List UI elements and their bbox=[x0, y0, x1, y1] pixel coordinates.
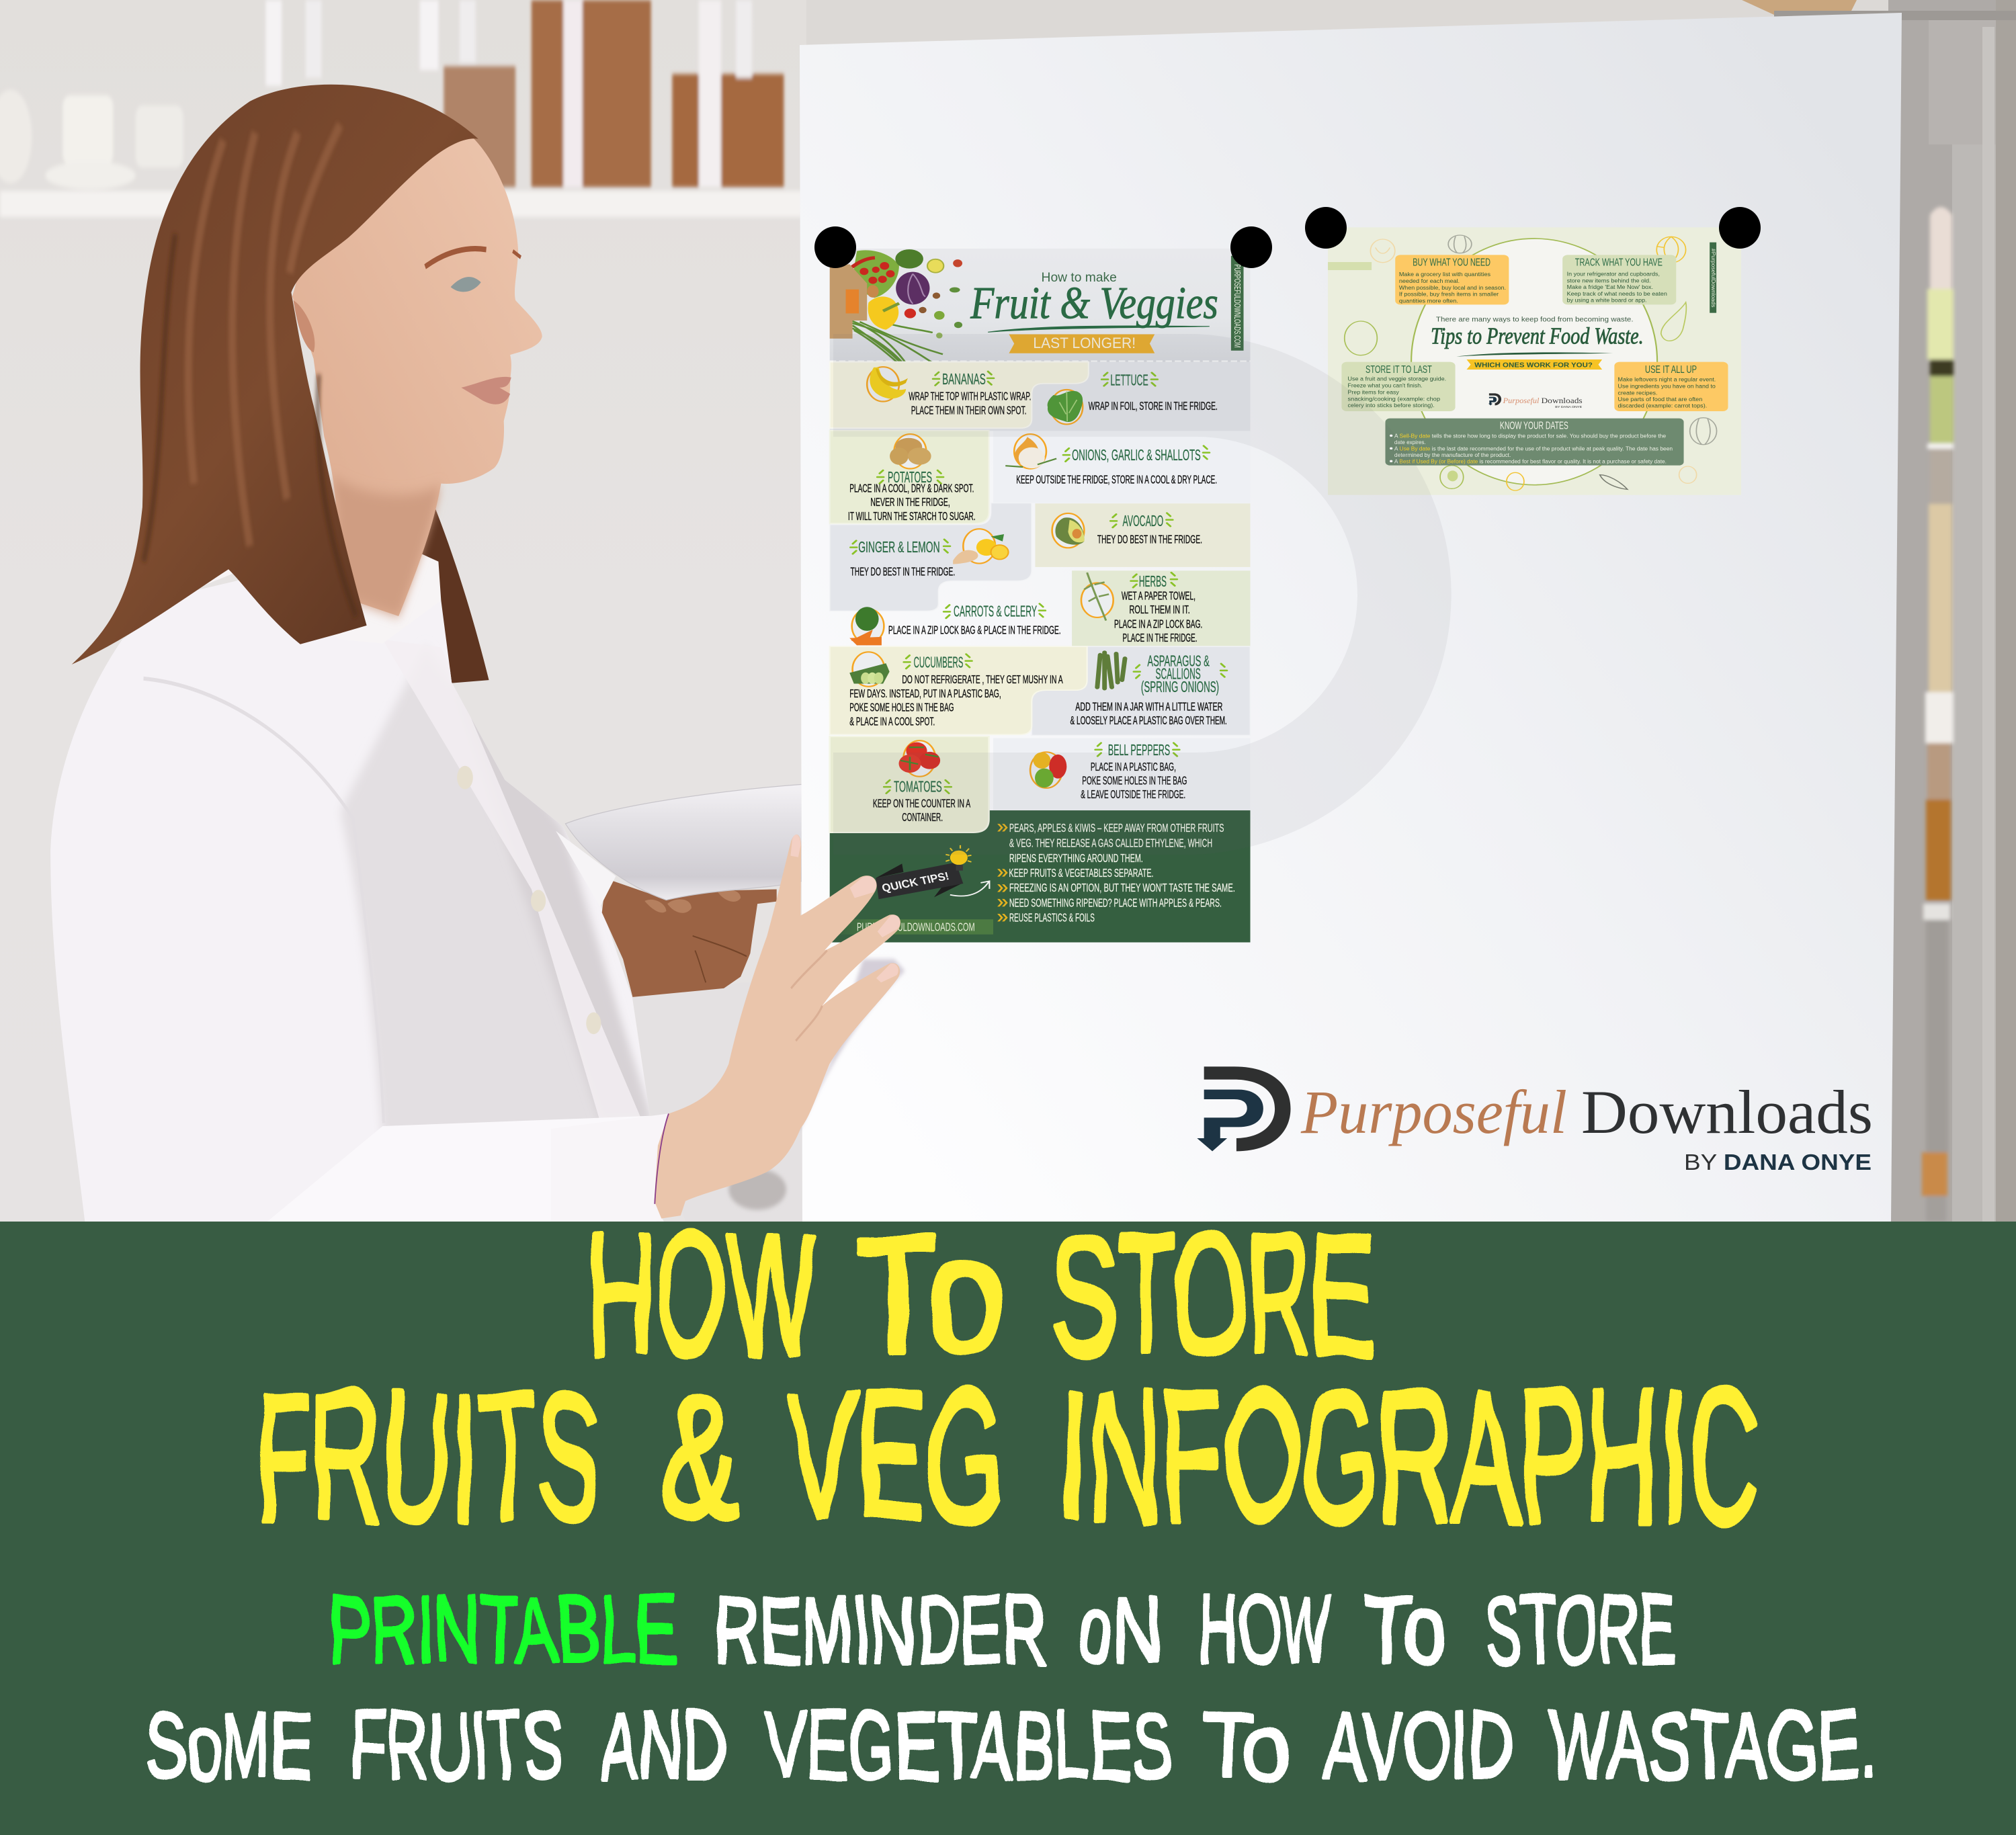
quick tips list: & VEG. THEY RELEASE A GAS CALLED ETHYLENE, WHICH bbox=[1009, 837, 1212, 850]
bowl and supporting hand bbox=[556, 784, 806, 1222]
card: use it all up: create recipes. bbox=[1618, 390, 1658, 396]
subheading line two: To bbox=[1202, 1693, 1290, 1799]
card: use it all up: Make leftovers night a regular event. bbox=[1618, 377, 1716, 383]
heading: lettuce: LETTUCE bbox=[1110, 372, 1148, 389]
shelf with jars bbox=[0, 0, 802, 217]
large infographic: how to make fruit and veggies last longer: PLACE IN A ZIP LOCK BAG & PLACE IN THE FRIDGE. bbox=[888, 624, 1061, 637]
text: cucumbers tip: DO NOT REFRIGERATE , THEY GET MUSHY IN A bbox=[902, 674, 1063, 687]
card: store it to last: Prep items for easy bbox=[1348, 389, 1399, 396]
heading: tips to prevent food waste: Tips to Prevent Food Waste. bbox=[1431, 323, 1644, 349]
icon: carrots and parsley bbox=[849, 607, 884, 645]
arrow: to tips bbox=[950, 881, 989, 896]
back hair bbox=[396, 484, 489, 683]
heading: cucumbers bbox=[904, 654, 972, 671]
subheading line two: FRUITS bbox=[351, 1693, 562, 1799]
quick tips list bbox=[997, 822, 1235, 925]
panel: potatoes: PLACE IN A COOL, DRY & DARK SPOT. bbox=[849, 482, 974, 495]
icon: cucumbers bbox=[849, 652, 890, 687]
panel: bell peppers bbox=[993, 738, 1251, 810]
heading: ginger and lemon: GINGER & LEMON bbox=[858, 539, 940, 556]
panel: cucumbers bbox=[830, 646, 1087, 734]
card: know your dates: A Best if Used By (or Before) date is recommended for best flavor or quality. It is not a purchase or safety date. bbox=[1394, 458, 1667, 465]
card: store it to last bbox=[1341, 362, 1456, 411]
heading: ginger and lemon bbox=[851, 539, 950, 556]
heading: how to store: HOW bbox=[585, 1201, 816, 1388]
card: buy what you need: When possible, buy local and in season. bbox=[1399, 285, 1506, 292]
icon: bananas bbox=[867, 367, 908, 401]
icon: onions and garlic bbox=[1005, 434, 1056, 468]
header panel bbox=[830, 249, 1251, 383]
logo mark bbox=[1197, 1066, 1290, 1151]
quick tips list: KEEP FRUITS & VEGETABLES SEPARATE. bbox=[1009, 867, 1154, 880]
subheading line one bbox=[328, 1576, 1675, 1683]
subheading line one: To bbox=[1363, 1576, 1446, 1683]
white shirt bbox=[50, 546, 667, 1223]
heading: herbs: HERBS bbox=[1139, 573, 1167, 590]
intro sentence: There are many ways to keep food from becoming waste. bbox=[1436, 315, 1634, 323]
icon: ginger and lemon bbox=[953, 529, 1009, 564]
logo wordmark: Downloads bbox=[1581, 1078, 1873, 1146]
heading: how to store: To bbox=[855, 1201, 1003, 1388]
text: potatoes tip: NEVER IN THE FRIDGE, bbox=[870, 497, 950, 509]
card: track what you have: Make a fridge 'Eat Me Now' box. bbox=[1567, 284, 1653, 291]
heading: fruits and veg infographic: & bbox=[659, 1353, 739, 1560]
heading: asparagus and scallions: SCALLIONS bbox=[1156, 666, 1201, 683]
card: know your dates: A Sell-By date tells the store how long to display the product for sale. You should buy the product before the bbox=[1394, 433, 1666, 439]
panel: tomatoes: KEEP ON THE COUNTER IN A bbox=[873, 798, 970, 810]
card: use it all up: USE IT ALL UP bbox=[1645, 364, 1697, 375]
hand shadow bbox=[791, 959, 905, 1134]
heading: fruit and veggies script: Fruit & Veggies bbox=[970, 278, 1218, 329]
ribbon: last longer: LAST LONGER! bbox=[1033, 335, 1136, 352]
large circle bbox=[1411, 239, 1657, 485]
swoosh underline bbox=[988, 326, 1210, 332]
website side tag bbox=[1231, 256, 1244, 351]
quick tips list: RIPENS EVERYTHING AROUND THEM. bbox=[1009, 852, 1143, 865]
panel: onions garlic and shallots: KEEP OUTSIDE THE FRIDGE, STORE IN A COOL & DRY PLACE. bbox=[1016, 474, 1217, 486]
icon: tomatoes bbox=[898, 740, 940, 777]
small logo: BY DANA ONYE bbox=[1555, 406, 1583, 409]
subheading line one: oN bbox=[1077, 1576, 1161, 1683]
ribbon: which ones work for you: WHICH ONES WORK FOR YOU? bbox=[1474, 362, 1593, 369]
card: store it to last: celery into sticks before storing). bbox=[1348, 402, 1435, 409]
card: know your dates: A Use By date is the last date recommended for the use of the product while at peak quality. The date has been bbox=[1394, 445, 1673, 452]
subheading line two: AND bbox=[600, 1693, 726, 1799]
card: store it to last: Use a fruit and veggie storage guide. bbox=[1348, 376, 1446, 382]
card: buy what you need: needed for each meal. bbox=[1399, 278, 1460, 285]
heading: fruits and veg infographic: VEG bbox=[787, 1353, 1005, 1560]
card: buy what you need: quantities more often. bbox=[1399, 298, 1458, 304]
finger creases bbox=[791, 951, 827, 1041]
heading: asparagus and scallions: ASPARAGUS & bbox=[1147, 653, 1210, 670]
heading: asparagus and scallions: (SPRING ONIONS) bbox=[1141, 679, 1219, 695]
heading: onions garlic and shallots: ONIONS, GARLIC & SHALLOTS bbox=[1072, 447, 1201, 464]
panel: carrots and celery: CARROTS & CELERY bbox=[954, 603, 1037, 620]
cuff edge bbox=[655, 1113, 669, 1204]
panel: avocado bbox=[1035, 503, 1251, 567]
icon: avocado bbox=[1052, 513, 1085, 548]
panel: ginger and lemon: THEY DO BEST IN THE FRIDGE. bbox=[851, 566, 955, 579]
card: know your dates: KNOW YOUR DATES bbox=[1500, 420, 1568, 431]
panel: lettuce: WRAP IN FOIL, STORE IN THE FRIDGE. bbox=[1089, 400, 1218, 413]
card: use it all up: Use ingredients you have on hand to bbox=[1618, 383, 1716, 390]
panel: asparagus and scallions: & LOOSELY PLACE A PLASTIC BAG OVER THEM. bbox=[1070, 715, 1227, 728]
quick tips list: FREEZING IS AN OPTION, BUT THEY WON'T TASTE THE SAME. bbox=[1009, 882, 1235, 895]
panel: herbs: PLACE IN A ZIP LOCK BAG. bbox=[1114, 618, 1202, 631]
card: buy what you need: If possible, buy fresh items in smaller bbox=[1399, 292, 1499, 298]
lower hand bbox=[602, 881, 777, 997]
card: use it all up: Use parts of food that are often bbox=[1618, 396, 1702, 403]
ribbon: last longer bbox=[1009, 334, 1154, 353]
white cuff at elbow bbox=[556, 831, 616, 906]
website side tag bbox=[1710, 243, 1716, 313]
heading: tomatoes bbox=[884, 779, 952, 796]
heading: onions garlic and shallots bbox=[1063, 446, 1210, 464]
heading: how to store: STORE bbox=[1054, 1201, 1376, 1388]
heading: herbs bbox=[1131, 572, 1177, 590]
website side tag: PURPOSEFULDOWNLOADS.COM bbox=[1232, 264, 1243, 347]
bottom title band bbox=[0, 1201, 2016, 1835]
panel: quick tips bbox=[830, 810, 1251, 942]
website strip bbox=[830, 919, 993, 935]
icon: light bulb bbox=[946, 845, 971, 871]
text: cucumbers tip: FEW DAYS. INSTEAD, PUT IN A PLASTIC BAG, bbox=[849, 688, 1001, 701]
logo wordmark: Purposeful bbox=[1300, 1078, 1567, 1146]
ribbon: which ones work for you bbox=[1466, 359, 1602, 370]
card: track what you have: In your refrigerator and cupboards, bbox=[1567, 271, 1660, 278]
white bowl bbox=[565, 784, 802, 900]
text: herbs tip bbox=[1114, 590, 1202, 644]
front hand on fridge bbox=[551, 835, 905, 1222]
quick tips list: NEED SOMETHING RIPENED? PLACE WITH APPLES & PEARS. bbox=[1009, 897, 1222, 910]
logo wordmark bbox=[1300, 1078, 1873, 1146]
panel: bell peppers: & LEAVE OUTSIDE THE FRIDGE. bbox=[1081, 789, 1185, 802]
card: store it to last: Freeze what you can't finish. bbox=[1348, 383, 1423, 389]
panel: cucumbers: CUCUMBERS bbox=[914, 654, 963, 671]
subheading line one: STORE bbox=[1485, 1576, 1675, 1683]
heading: carrots and celery bbox=[943, 603, 1046, 620]
heading: bell peppers bbox=[1095, 742, 1179, 759]
face and neck bbox=[292, 132, 542, 616]
text: bananas tip bbox=[909, 390, 1031, 417]
card: track what you have: by using a white board or app. bbox=[1567, 298, 1646, 304]
quick tips list: REUSE PLASTICS & FOILS bbox=[1009, 912, 1095, 925]
subheading line one: REMINDER bbox=[714, 1576, 1048, 1683]
text: tomatoes tip bbox=[873, 798, 970, 824]
text: bell peppers tip bbox=[1081, 761, 1187, 802]
heading: avocado: AVOCADO bbox=[1123, 513, 1163, 530]
panel: tomatoes bbox=[830, 736, 989, 833]
heading: how to store bbox=[585, 1201, 1376, 1388]
finger nails bbox=[790, 835, 900, 982]
text: bell peppers tip: PLACE IN A PLASTIC BAG, bbox=[1091, 761, 1176, 774]
heading: fruits and veg infographic bbox=[253, 1353, 1759, 1560]
large infographic: how to make fruit and veggies last longer bbox=[830, 249, 1251, 942]
swoosh underline bbox=[1456, 352, 1613, 357]
woman bbox=[50, 85, 667, 1223]
card: know your dates bbox=[1385, 419, 1684, 466]
panel: carrots and celery bbox=[849, 603, 1061, 645]
front hair bbox=[72, 85, 478, 665]
small logo bbox=[1488, 393, 1583, 409]
text: herbs tip: PLACE IN THE FRIDGE. bbox=[1123, 632, 1198, 644]
text: asparagus tip: ADD THEM IN A JAR WITH A LITTLE WATER bbox=[1075, 701, 1222, 714]
hand bbox=[655, 835, 900, 1219]
card: track what you have bbox=[1562, 255, 1676, 304]
subheading line two: SoME bbox=[145, 1693, 312, 1799]
brand logo bbox=[1197, 1066, 1873, 1175]
text: cucumbers tip: & PLACE IN A COOL SPOT. bbox=[849, 716, 935, 728]
panel: potatoes: IT WILL TURN THE STARCH TO SUGAR. bbox=[848, 511, 976, 523]
panel: bananas bbox=[830, 362, 1089, 428]
heading: avocado bbox=[1110, 513, 1173, 530]
panel: avocado: THEY DO BEST IN THE FRIDGE. bbox=[1097, 534, 1202, 546]
panel: herbs bbox=[1072, 570, 1251, 646]
heading: bell peppers: BELL PEPPERS bbox=[1108, 742, 1170, 759]
icon: herbs bbox=[1081, 572, 1114, 621]
kitchen background photo bbox=[0, 0, 2016, 1222]
heading: tomatoes: TOMATOES bbox=[894, 779, 942, 796]
subheading line one: PRINTABLE bbox=[328, 1576, 677, 1683]
subheading line one: HOW bbox=[1200, 1576, 1331, 1683]
card: buy what you need bbox=[1395, 255, 1509, 304]
door face bbox=[800, 13, 1902, 1222]
card: buy what you need: Make a grocery list with quantities bbox=[1399, 271, 1490, 278]
icon: bell peppers bbox=[1030, 752, 1066, 788]
door handle shadow bbox=[728, 1169, 786, 1210]
subheading line two bbox=[145, 1693, 1877, 1799]
small logo: Purposeful bbox=[1503, 396, 1540, 405]
text: cucumbers tip bbox=[849, 674, 1063, 728]
text: potatoes tip bbox=[848, 482, 976, 523]
right side of fridge with interior slit bbox=[1774, 0, 2016, 1222]
watermark D on fridge bbox=[833, 334, 1452, 855]
heading: fruits and veg infographic: FRUITS bbox=[253, 1353, 601, 1560]
panel: potatoes bbox=[830, 431, 989, 523]
panel: ginger and lemon bbox=[830, 503, 1032, 611]
icon: lettuce bbox=[1048, 390, 1083, 424]
card: track what you have: Keep track of what needs to be eaten bbox=[1567, 291, 1667, 298]
small logo: Downloads bbox=[1541, 396, 1583, 405]
card: know your dates: date expires. bbox=[1394, 439, 1426, 446]
quick tips ribbon: QUICK TIPS! bbox=[880, 869, 950, 894]
subheading line two: VEGETABLES bbox=[765, 1693, 1173, 1799]
black magnets bbox=[814, 207, 1761, 268]
icon: groceries bag and vegetables bbox=[830, 249, 962, 383]
card: store it to last: STORE IT TO LAST bbox=[1366, 364, 1432, 375]
food doodles bbox=[1345, 235, 1717, 490]
text: tomatoes tip: CONTAINER. bbox=[902, 812, 943, 824]
text: asparagus tip bbox=[1070, 701, 1227, 728]
heading: bananas: BANANAS bbox=[942, 371, 986, 388]
subheading line two: AVOID bbox=[1325, 1693, 1515, 1799]
card: use it all up bbox=[1614, 362, 1728, 411]
fridge door bbox=[800, 0, 2016, 1222]
card: use it all up: discarded (example: carrot tops). bbox=[1618, 403, 1707, 409]
heading: potatoes bbox=[877, 469, 943, 486]
sleeve cuff bbox=[551, 1113, 669, 1222]
small infographic: tips to prevent food waste bbox=[1328, 227, 1741, 495]
heading: how to make: How to make bbox=[1042, 270, 1117, 284]
icon: potatoes bbox=[890, 434, 931, 468]
text: herbs tip: ROLL THEM IN IT. bbox=[1130, 603, 1190, 616]
heading: asparagus and scallions bbox=[1134, 653, 1227, 695]
website side tag: #PurposefulDownloads bbox=[1710, 249, 1716, 308]
logo byline: BY DANA ONYE bbox=[1684, 1150, 1872, 1175]
heading: potatoes: POTATOES bbox=[888, 469, 932, 486]
heading: lettuce bbox=[1101, 372, 1158, 389]
wall below bowl bbox=[632, 982, 806, 1222]
card: track what you have: store new items behind the old. bbox=[1567, 278, 1651, 284]
card: know your dates: determined by the manufacture of the product. bbox=[1394, 452, 1511, 459]
panel: bananas: WRAP THE TOP WITH PLASTIC WRAP. bbox=[909, 390, 1031, 403]
panel: lettuce bbox=[830, 362, 1251, 431]
card: buy what you need: BUY WHAT YOU NEED bbox=[1413, 257, 1490, 268]
heading: bananas bbox=[933, 371, 994, 388]
quick tips list: PEARS, APPLES & KIWIS – KEEP AWAY FROM OTHER FRUITS bbox=[1009, 822, 1224, 835]
text: herbs tip: WET A PAPER TOWEL, bbox=[1122, 590, 1195, 603]
website strip: PURPOSEFULDOWNLOADS.COM bbox=[857, 921, 975, 934]
panel: bell peppers: POKE SOME HOLES IN THE BAG bbox=[1082, 775, 1187, 787]
panel: onions garlic and shallots bbox=[993, 431, 1251, 503]
icon: asparagus bbox=[1097, 652, 1125, 689]
panel: asparagus and scallions bbox=[1032, 646, 1251, 735]
text: bananas tip: PLACE THEM IN THEIR OWN SPOT. bbox=[911, 404, 1026, 417]
text: cucumbers tip: POKE SOME HOLES IN THE BAG bbox=[849, 701, 954, 714]
card: store it to last: snacking/cooking (example: chop bbox=[1348, 396, 1440, 402]
card: track what you have: TRACK WHAT YOU HAVE bbox=[1575, 257, 1663, 268]
